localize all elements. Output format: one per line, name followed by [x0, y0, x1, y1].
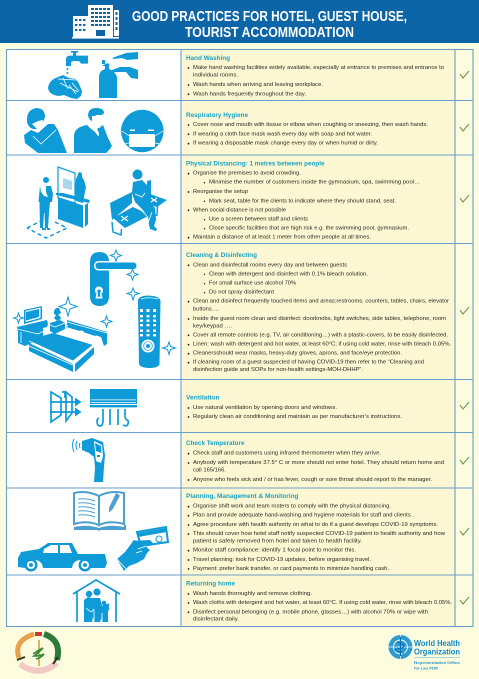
- text: cleaning and disinfecting: Inside the guest room clean and disinfect: doorknobs, light switches, side tables, telephone, room: [193, 316, 446, 322]
- panel: physical distancing: [27, 167, 167, 238]
- text: cleaning and disinfecting: [186, 253, 451, 373]
- logo: World Health Organization: World Health: [414, 638, 460, 648]
- text: hand washing: [186, 56, 444, 97]
- text: ventilation: Regularly clean air conditioning and maintain as per manufacturer’s instructions.: [193, 414, 402, 420]
- text: returning home: Wash cloths with detergent and hot water, at least 60°C. If using cold water, rinse with bleach 0.05%.: [193, 600, 452, 606]
- icon: counter with protective screen: [56, 167, 90, 228]
- text: cleaning and disinfecting: buttons….: [193, 306, 219, 312]
- text: check temperature: Anyone who feels sick and / or has fever, cough or sore throat should report to the manager.: [193, 477, 432, 483]
- text: physical distancing: Minimise the number of customers inside the gymnasium, spa, swimming pool…: [209, 180, 420, 186]
- panel: planning, management and monitoring: [18, 492, 168, 572]
- icon: hotel building: [72, 5, 119, 39]
- text: ventilation: Ventilation: [186, 395, 220, 401]
- text: check temperature: call 165/166.: [193, 468, 226, 474]
- text: check temperature: Anybody with temperature 37.5° C or more should not enter hotel. They should return home and: [193, 460, 444, 466]
- checkmarks column: [460, 71, 469, 604]
- icon: person coughing into elbow: [24, 108, 67, 153]
- text: returning home: Disinfect personal belonging (e.g. mobile phone, glasses…) with alcohol 70% or wipe with: [193, 609, 428, 615]
- text: check temperature: Check staff and customers using infrared thermometer when they arrive.: [193, 451, 381, 457]
- text: planning, management and monitoring: Planning, Management & Monitoring: [186, 494, 299, 500]
- icon: infrared thermometer: [72, 438, 105, 482]
- text: cleaning and disinfecting: Clean with detergent and disinfect with 0.1% bleach solution.: [209, 271, 368, 277]
- text: physical distancing: Organise the premises to avoid crowding.: [193, 171, 301, 177]
- text: cleaning and disinfecting: Clean and disinfect frequently touched items and areas:restrooms, counters, tables, chairs, elevator: [193, 299, 449, 305]
- icon: family in house: [73, 580, 120, 622]
- text: planning, management and monitoring: Plan and provide adequate hand-washing and hygiene materials for staff and clients .: [193, 513, 414, 519]
- icon: person sneezing into tissue: [74, 108, 112, 153]
- icon: door handle: [90, 252, 138, 306]
- title: GOOD PRACTICES FOR HOTEL, GUEST HOUSE,: [132, 9, 407, 25]
- text: returning home: disinfectant daily.: [193, 617, 239, 623]
- text: cleaning and disinfecting: Cover all remote controls (e.g. TV, air conditioning…) with a plastic-covers, to be easily disinfected.: [193, 332, 448, 338]
- text: ventilation: Use natural ventilation by opening doors and windows.: [193, 405, 337, 411]
- text: hand washing: Wash hands frequently throughout the day.: [193, 91, 306, 97]
- text: physical distancing: Use a screen between staff and clients: [209, 217, 308, 223]
- icon: seated person on marked bench: [110, 170, 167, 235]
- logo: World Health Organization: Representative Office: [414, 660, 461, 665]
- icon: open book and pencil: [74, 492, 126, 532]
- text: planning, management and monitoring: Travel planning: look for COVID-19 updates, before organising travel.: [193, 557, 371, 563]
- text: respiratory hygiene: Cover nose and mouth with tissue or elbow when coughing or sneezing, then wash hands.: [193, 122, 428, 128]
- icon: hotel bed with furniture: [17, 306, 107, 372]
- icon: pickup truck: [18, 543, 107, 572]
- text: planning, management and monitoring: Monitor staff compliance: identify 1 focal point to monitor this.: [193, 548, 356, 554]
- text: physical distancing: [186, 161, 420, 241]
- panel: hand washing: [48, 51, 138, 99]
- text: physical distancing: Physical Distancing: 1 metres between people: [186, 161, 325, 167]
- header banner: [0, 0, 479, 43]
- text: ventilation: [186, 395, 402, 420]
- text: returning home: Returning home: [186, 582, 236, 588]
- panel: returning home: [73, 580, 120, 622]
- text: planning, management and monitoring: [186, 494, 446, 572]
- text: respiratory hygiene: If wearing a disposable mask change every day or when humid or dirty.: [193, 141, 378, 147]
- text: physical distancing: Maintain a distance of at least 1 meter from other people at all times.: [193, 235, 371, 241]
- icon: standing customer on floor marker: [27, 177, 67, 238]
- text: planning, management and monitoring: patient is safely removed from hotel and taken to health facility.: [193, 538, 362, 544]
- icon: remote control: [138, 296, 160, 368]
- text: hand washing: individual rooms.: [193, 73, 238, 79]
- text: cleaning and disinfecting: disinfection guide and SOPs for non-health settings-MOH-DHHP”.: [193, 367, 363, 373]
- text: respiratory hygiene: [186, 113, 428, 147]
- panel: cleaning and disinfecting: [13, 250, 175, 372]
- text: physical distancing: When social distance is not possible: [193, 207, 286, 213]
- text: cleaning and disinfecting: key/keypad ….: [193, 323, 232, 329]
- text: planning, management and monitoring: This should cover how hotel staff notify suspected COVID-19 patient to health authority and how: [193, 531, 446, 537]
- text: planning, management and monitoring: Payment: prefer bank transfer, or card payments to minimize handling cash.: [193, 566, 389, 572]
- logo: Ministry of Health emblem: [17, 632, 58, 671]
- text: respiratory hygiene: If wearing a cloth face mask wash every day with soap and hot water.: [193, 131, 372, 137]
- panel: check temperature: [72, 438, 105, 482]
- text: planning, management and monitoring: Organise shift work and team rosters to comply with the physical distancing.: [193, 504, 391, 510]
- text: cleaning and disinfecting: Do not spray disinfectant: [209, 290, 274, 296]
- text: returning home: [186, 582, 452, 623]
- icon: soap bottle and hands: [99, 52, 138, 98]
- text: cleaning and disinfecting: Clean and disinfectall rooms every day and between guests: [193, 262, 347, 268]
- icon: hand holding bank card: [117, 527, 168, 571]
- icons: sparkles: [13, 250, 175, 354]
- text: cleaning and disinfecting: For small surface use alcohol 70%: [209, 281, 296, 287]
- text: check temperature: Check Temperature: [186, 441, 245, 447]
- panel: respiratory hygiene: [24, 108, 164, 153]
- text: respiratory hygiene: Respiratory Hygiene: [186, 113, 249, 119]
- title: TOURIST ACCOMMODATION: [185, 25, 354, 41]
- text: physical distancing: Mark seat, table for the clients to indicate where they should stand, seat.: [209, 198, 396, 204]
- icon: open window with airflow arrows: [50, 392, 82, 422]
- text: planning, management and monitoring: Agree procedure with health authority on what to do if a guest develops COVID-19 symptoms.: [193, 522, 438, 528]
- text: returning home: Wash hands thoroughly and remove clothing.: [193, 591, 312, 597]
- logo: World Health Organization: for Lao PDR: [414, 666, 438, 670]
- text: hand washing: Hand Washing: [186, 56, 230, 62]
- text: hand washing: Wash hands when arriving and leaving workplace.: [193, 82, 323, 88]
- logo: World Health Organization: Organization: [414, 646, 460, 656]
- text: check temperature: [186, 441, 444, 483]
- text: physical distancing: Reorganise the setup: [193, 189, 248, 195]
- icon: air conditioner: [90, 389, 137, 426]
- text: cleaning and disinfecting: Linen: wash with detergent and hot water, at least 60°C; if using cold water, rinse with bleach 0.05%.: [193, 342, 451, 348]
- text: hand washing: Make hand washing facilities widely available, especially at entrance to premises and entrance to: [193, 65, 444, 71]
- panel: ventilation: [50, 389, 137, 426]
- icon: tap and washing hands: [48, 51, 88, 99]
- text: physical distancing: Close specific facilities that are high risk e.g. the swimming pool, gymnasium.: [209, 226, 409, 232]
- title: [132, 9, 407, 41]
- logo: World Health Organization: [388, 635, 461, 670]
- text: cleaning and disinfecting: Cleaning & Disinfecting: [186, 253, 257, 259]
- text: cleaning and disinfecting: If cleaning room of a guest suspected of having COVID-19 then refer to the “Cleaning and: [193, 360, 424, 366]
- icon: face with mask: [121, 110, 164, 152]
- text: cleaning and disinfecting: Cleanersshould wear masks, heavy-duty gloves, aprons, and face/eye protection.: [193, 351, 402, 357]
